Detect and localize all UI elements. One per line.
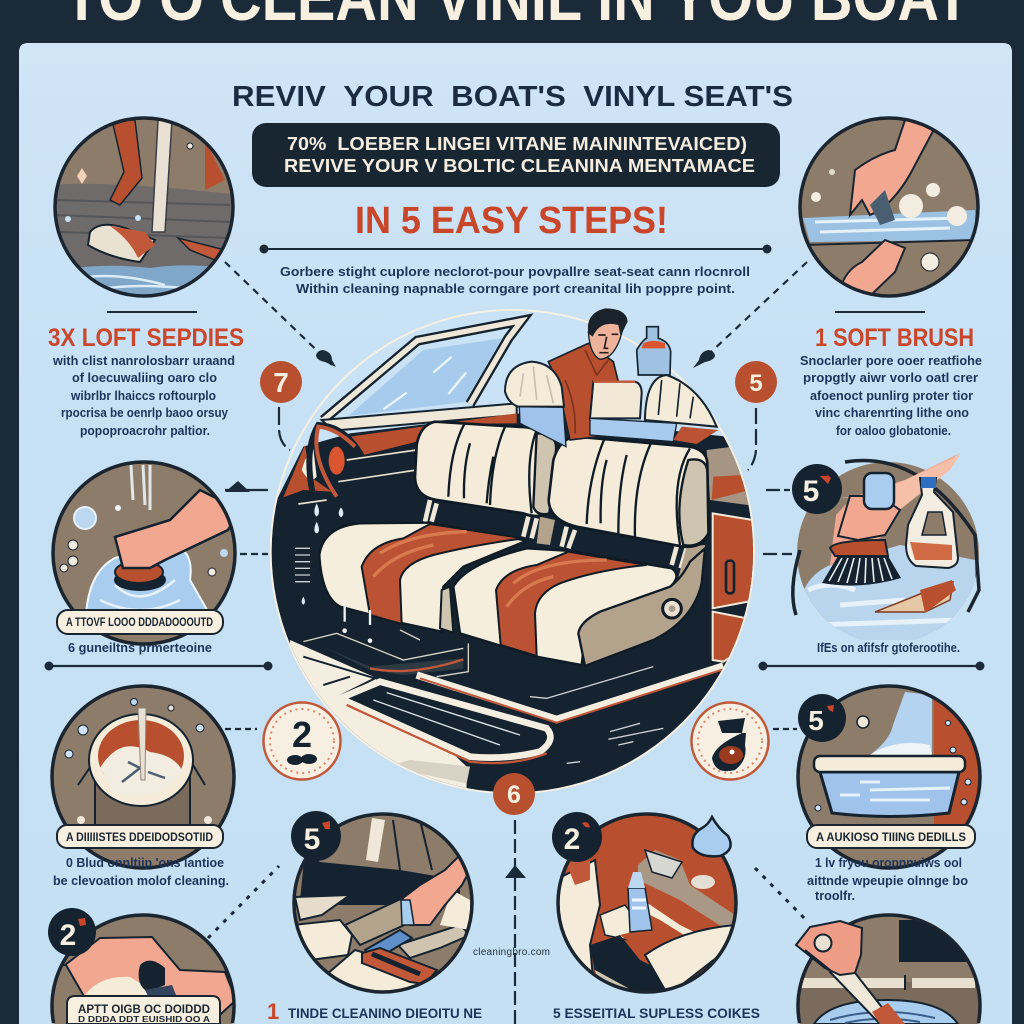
- badge: number 2: [552, 812, 602, 862]
- dashed arrows around the hero: [44, 262, 984, 1024]
- text: 1 tinde cleaning: TINDE CLEANINO DIEOITU NE: [288, 1006, 482, 1021]
- text block: 3X loft sepdies: popoproacrohr paltior.: [80, 424, 210, 438]
- badge: number 2: 2: [60, 919, 76, 952]
- hero illustration: boat seats: [260, 300, 760, 800]
- left cushion: [319, 523, 527, 632]
- subheading: IN 5 EASY STEPS!: [355, 200, 668, 242]
- badge: number 5: [291, 811, 341, 861]
- front seat back right: [549, 437, 709, 547]
- badge: number 5: 5: [304, 823, 320, 856]
- text: 5 essential supplies: 5 ESSEITIAL SUPLESS COIKES: [553, 1006, 760, 1021]
- heading: REVIV YOUR BOAT'S VINYL SEAT'S: [232, 81, 793, 113]
- callout: bucket caption: [53, 825, 229, 888]
- badge: number 5: 5: [808, 705, 824, 736]
- badge: number 2: [48, 908, 96, 956]
- icon: number 6 marker: [493, 773, 535, 815]
- text block: 1 soft brush: 1 SOFT BRUSH: [815, 324, 974, 352]
- badge: number 2: 2: [564, 823, 580, 856]
- icon: number 7 marker: [260, 361, 302, 403]
- floor and running board: [303, 630, 468, 677]
- panel: step circle tub: [795, 685, 985, 875]
- callout: tub caption: 1 lv fryou oropnnuiws ool: [815, 856, 962, 870]
- panel: step circle stirring water: [795, 912, 985, 1024]
- panel: step circle spray bottle: [552, 812, 745, 1002]
- badge: number 5: [792, 464, 842, 514]
- text block: 3X loft sepdies: rpocrisa be oenrlp baoo orsuy: [61, 406, 228, 420]
- seat back rear struts: [425, 500, 687, 568]
- callout: dark banner: [252, 123, 780, 187]
- text: 1 tinde cleaning: [267, 999, 482, 1024]
- lower-left sill area: [290, 640, 467, 800]
- callout: sponge caption: 6 guneiltns prmerteoine: [68, 641, 212, 655]
- callout: sponge caption: A TTOVF LOOO DDDADOOOUTD: [66, 617, 213, 629]
- icon: number 7 marker: 7: [273, 367, 289, 398]
- icon: water drop: [692, 817, 731, 856]
- callout: applying caption box: D DDDA DDT EUISHID OO A: [78, 1014, 210, 1024]
- intro text block: [260, 244, 772, 296]
- text block: 3X loft sepdies: with clist nanrolosbarr uraand: [52, 354, 235, 368]
- text block: 1 soft brush: propgtly aiwr vorlo oatl crer: [803, 371, 978, 385]
- icon: number 5 marker: [735, 361, 777, 403]
- callout: tub caption: aittnde wpeupie olnnge bo: [807, 874, 968, 888]
- callout: bucket caption: 0 Blud onnltiip 'ons lantioe: [66, 856, 224, 870]
- callout: dark banner: REVIVE YOUR V BOLTIC CLEANINA MENTAMACE: [284, 156, 755, 176]
- window frame: [323, 321, 522, 420]
- rear seats and bottle: [505, 327, 718, 447]
- callout: tub caption: A AUKIOSO TIIING DEDILLS: [816, 832, 966, 844]
- badge: number 5: 5: [803, 475, 819, 508]
- right cushion: [453, 548, 676, 665]
- text block: 1 soft brush: for oaloo globatonie.: [836, 424, 951, 438]
- text block: 3X loft sepdies: wibrlbr lhaiccs roftourplo: [70, 389, 216, 403]
- panel: step circle interior brush: [290, 811, 480, 1002]
- panel: step circle wiping vinyl: [795, 115, 985, 305]
- icon: stamped number 2: [264, 702, 340, 780]
- watermark: cleaningbro.com: [473, 947, 550, 958]
- icon: number 5 marker: 5: [749, 370, 763, 397]
- panel: step circle brush and bottle: [792, 453, 985, 655]
- right cabinets: [706, 447, 748, 506]
- text block: 1 soft brush: Snoclarler pore ooer reatfiohe: [800, 354, 982, 368]
- text block: 1 soft brush: [800, 312, 982, 438]
- front seat back left: [415, 422, 557, 516]
- callout: bucket caption: A DIIIIISTES DDEIDODSOTIID: [66, 832, 213, 844]
- icon: hand with nut: [796, 921, 862, 975]
- callout: tub caption: troolfr.: [815, 889, 855, 903]
- dash and steering wheel: [322, 403, 517, 431]
- panel: step circle bucket: [50, 685, 240, 875]
- icon: stamped number shape: [692, 702, 768, 780]
- callout: tub caption: [807, 825, 975, 903]
- callout: bucket caption: be clevoation molof cleaning.: [53, 874, 229, 888]
- badge: number 5: [798, 694, 846, 742]
- panel: step circle applying cleaner: [48, 908, 240, 1024]
- panel: step circle scrubbing boot: [53, 116, 235, 298]
- seat side panel: [578, 548, 705, 666]
- callout: applying caption box: APTT OIGB OC DOIDDD: [78, 1004, 210, 1016]
- callout: applying caption box: [67, 996, 220, 1024]
- text: 1 tinde cleaning: 1: [267, 999, 279, 1024]
- text block: 3X loft sepdies: [48, 312, 244, 438]
- text block: 1 soft brush: vinc charenrting lithe ono: [815, 406, 969, 420]
- panel: step circle sponge: [50, 460, 240, 650]
- text block: 3X loft sepdies: of loecuwaliing oaro clo: [72, 371, 217, 385]
- text block: 1 soft brush: afoenoct punlirg proter tior: [810, 389, 973, 403]
- callout: dark banner: 70% LOEBER LINGEI VITANE MAININTEVAICED): [287, 134, 747, 154]
- intro text block: Gorbere stight cuplore neclorot-pour povpallre seat-seat cann rlocnroll: [280, 265, 750, 279]
- man: [548, 308, 628, 440]
- panel: step circle brush and bottle: IfEs on afifsfr gtoferootihe.: [817, 641, 960, 655]
- text block: 3X loft sepdies: 3X LOFT SEPDIES: [48, 324, 244, 352]
- icon: stamped number 2: 2: [292, 714, 312, 755]
- intro text block: Within cleaning napnable corngare port creanital lih poppre point.: [296, 282, 735, 296]
- icon: number 6 marker: 6: [507, 781, 521, 809]
- callout: sponge caption: [57, 610, 223, 655]
